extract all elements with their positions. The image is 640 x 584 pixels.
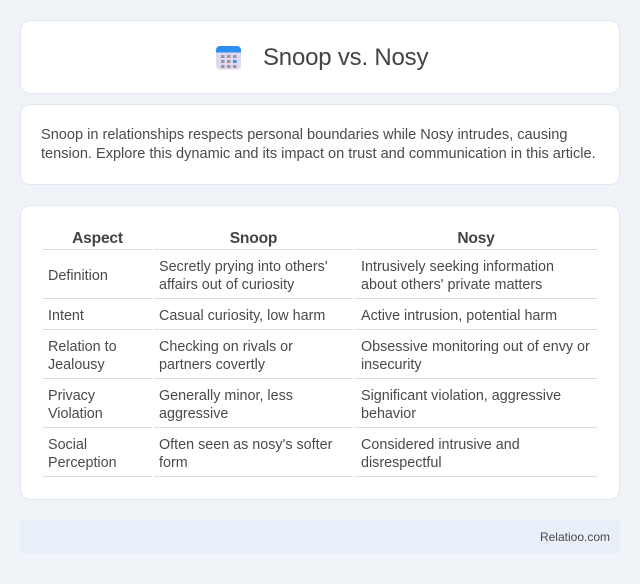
row: Intent: Casual curiosity, low harm xyxy=(159,308,325,324)
row: Social Perception: form xyxy=(159,455,188,471)
intro text: Snoop in relationships respects personal boundaries while Nosy intrudes, causing xyxy=(41,127,567,143)
row: Intent: Active intrusion, potential harm xyxy=(361,308,557,324)
row: Privacy Violation: behavior xyxy=(361,406,416,422)
intro text xyxy=(41,127,596,162)
footer bar xyxy=(20,520,620,554)
row: Relation to Jealousy: Relation to xyxy=(48,339,117,355)
row: Privacy Violation: Violation xyxy=(48,406,103,422)
row: Privacy Violation: aggressive xyxy=(159,406,228,422)
row: Privacy Violation: Privacy xyxy=(48,388,95,404)
row: Intent: Intent xyxy=(48,308,84,324)
row: Social Perception: Considered intrusive and xyxy=(361,437,520,453)
row: Definition: Intrusively seeking information xyxy=(361,259,554,275)
row: Relation to Jealousy xyxy=(48,339,590,373)
table header: Nosy xyxy=(457,230,495,247)
row: Social Perception: disrespectful xyxy=(361,455,442,471)
row: Definition: Secretly prying into others' xyxy=(159,259,328,275)
row: Definition: Definition xyxy=(48,268,108,284)
row: Definition: affairs out of curiosity xyxy=(159,277,294,293)
row: Relation to Jealousy: Checking on rivals or xyxy=(159,339,293,355)
row: Definition xyxy=(48,259,554,293)
row: Privacy Violation xyxy=(48,388,561,422)
row: Intent xyxy=(48,308,557,324)
footer credit: Relatioo.com xyxy=(540,530,610,544)
row: Relation to Jealousy: Jealousy xyxy=(48,357,105,373)
comparison table panel xyxy=(20,205,620,500)
row: Social Perception xyxy=(48,437,520,471)
row: Relation to Jealousy: Obsessive monitoring out of envy or xyxy=(361,339,590,355)
row: Social Perception: Often seen as nosy's softer xyxy=(159,437,332,453)
row: Social Perception: Social xyxy=(48,437,87,453)
row: Privacy Violation: Generally minor, less xyxy=(159,388,293,404)
table header: Aspect xyxy=(72,230,123,247)
row: Privacy Violation: Significant violation, aggressive xyxy=(361,388,561,404)
row: Relation to Jealousy: partners covertly xyxy=(159,357,265,373)
title: Snoop vs. Nosy xyxy=(263,44,428,71)
intro panel xyxy=(20,104,620,185)
intro text: tension. Explore this dynamic and its impact on trust and communication in this article. xyxy=(41,146,596,162)
row: Social Perception: Perception xyxy=(48,455,117,471)
row: Relation to Jealousy: insecurity xyxy=(361,357,422,373)
table header: Snoop xyxy=(230,230,277,247)
icon: calendar xyxy=(216,46,241,70)
table header xyxy=(72,230,495,247)
title panel xyxy=(20,20,620,94)
row: Definition: about others' private matters xyxy=(361,277,542,293)
